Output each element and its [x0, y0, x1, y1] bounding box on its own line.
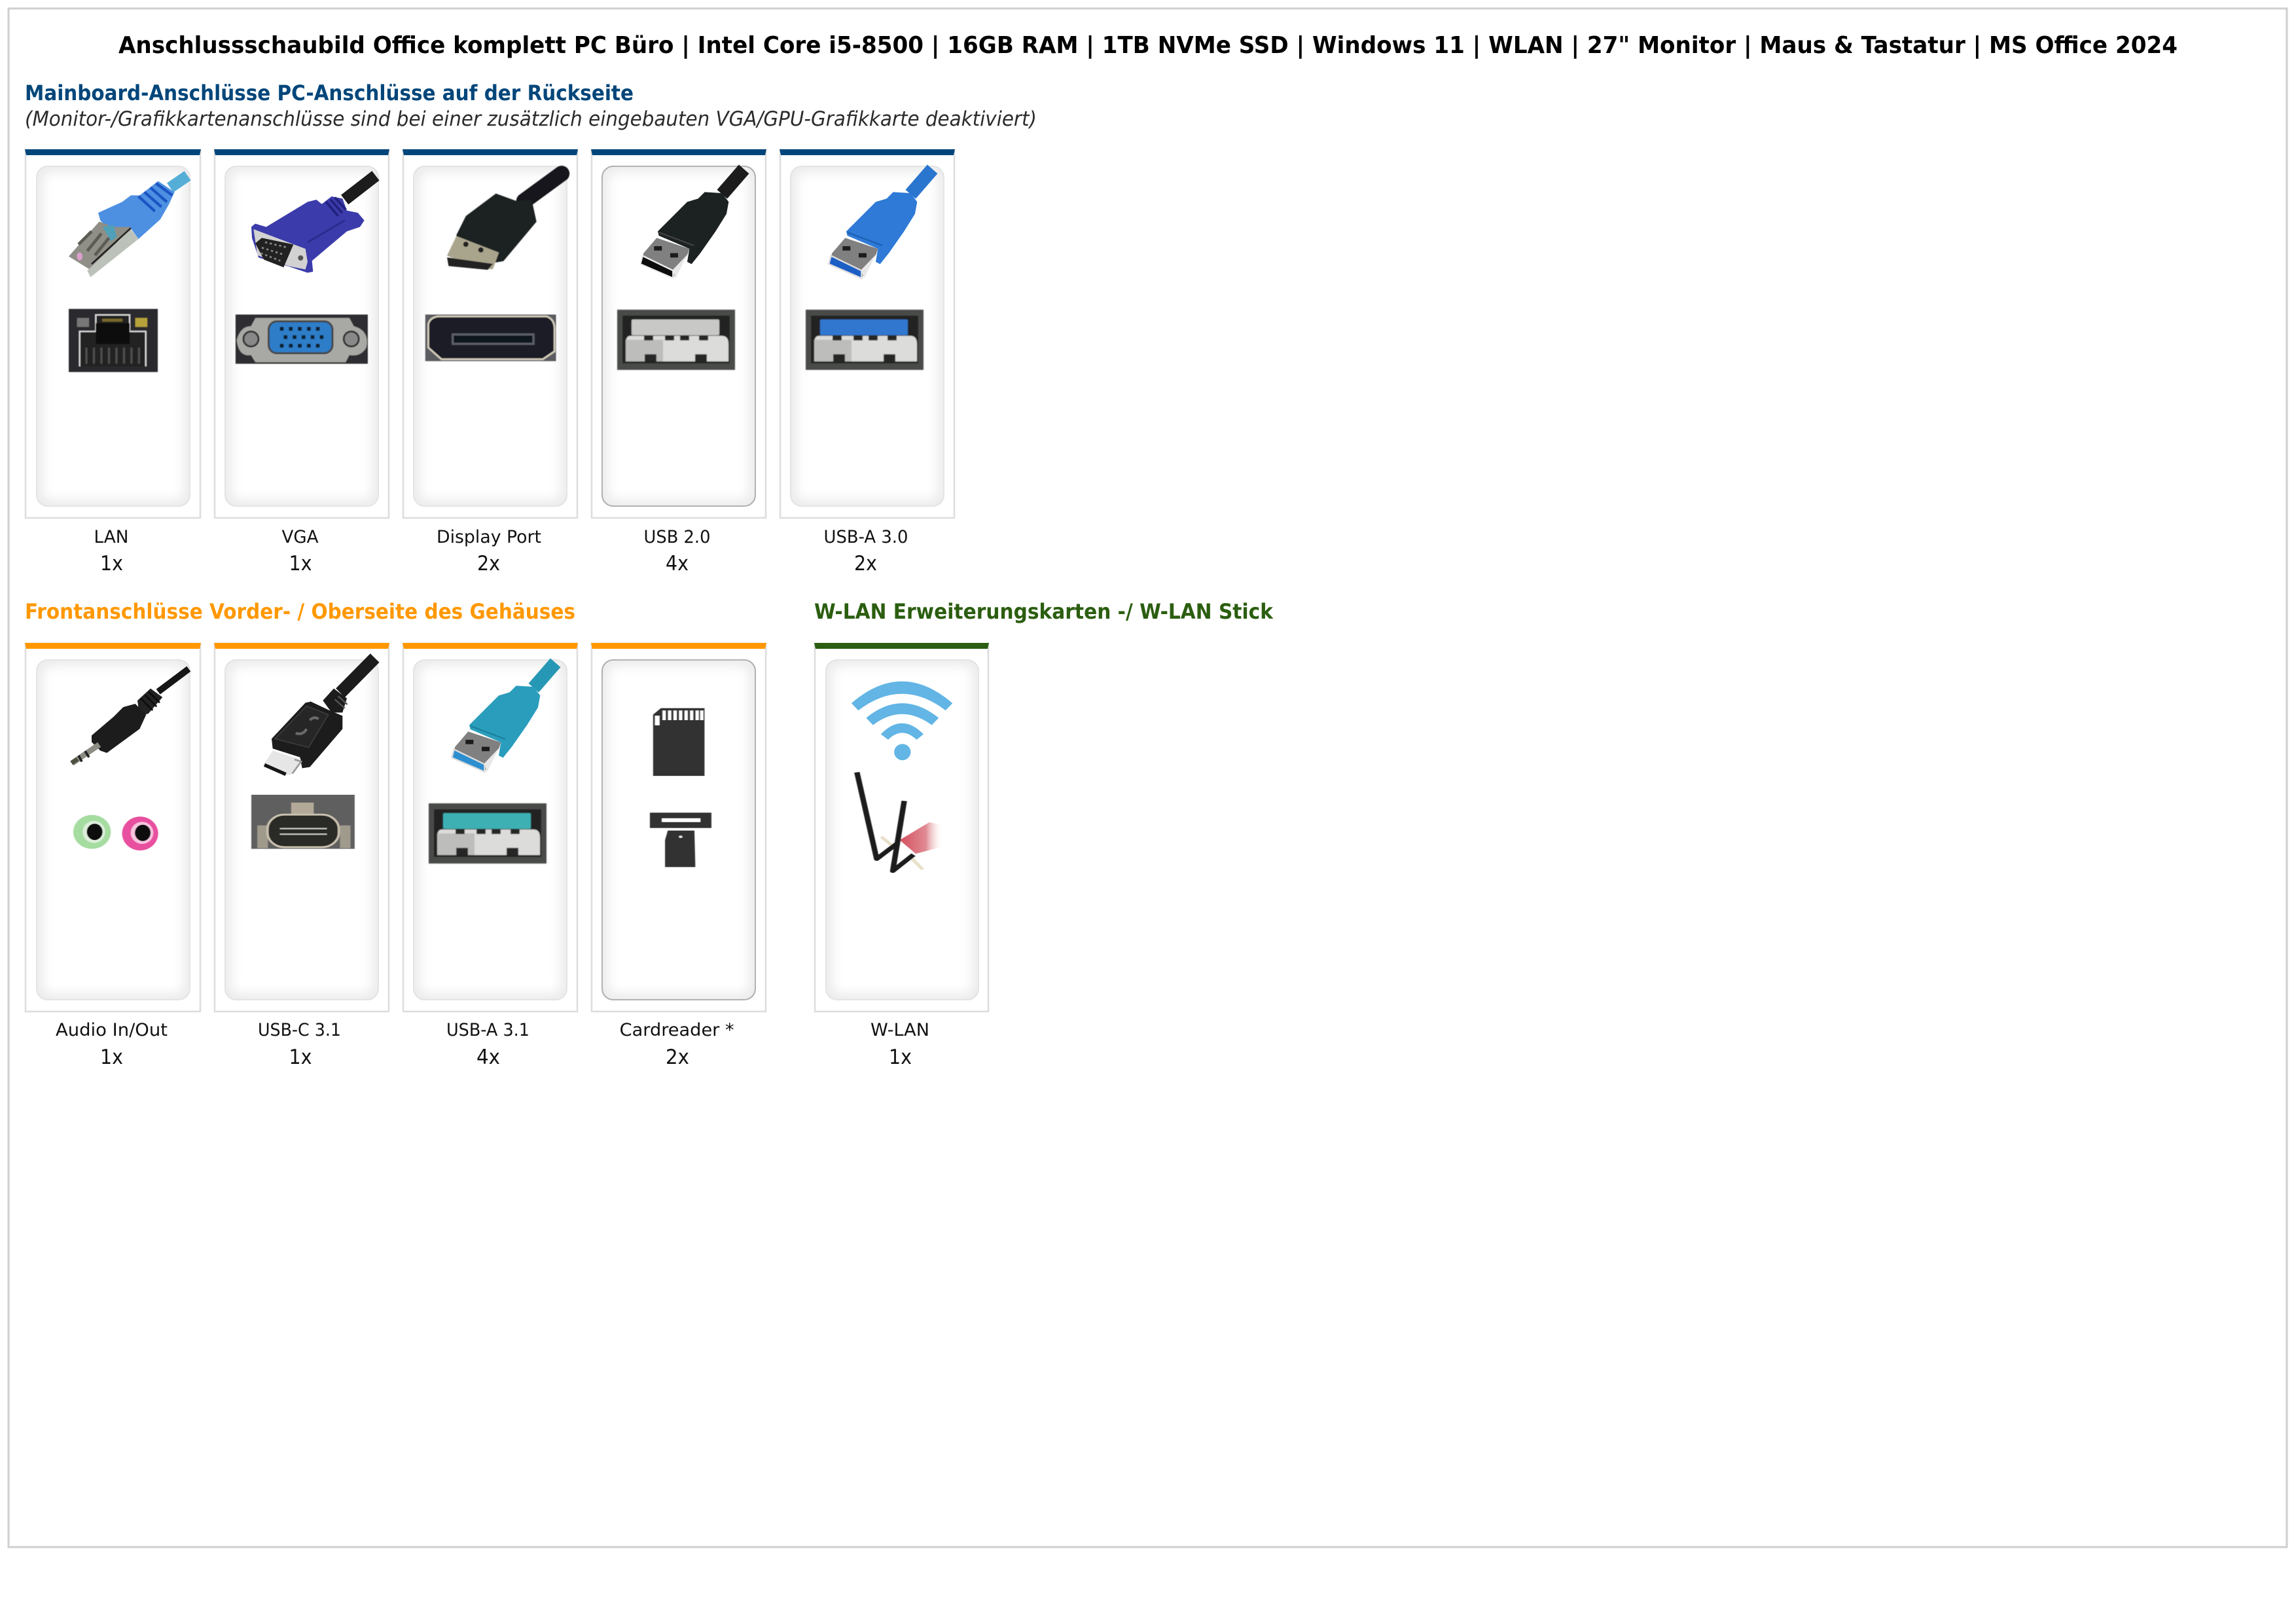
inner panel	[225, 166, 378, 506]
label: USB 2.0: USB 2.0	[644, 527, 711, 547]
icon: WLAN card with antennas	[857, 773, 943, 871]
quantity: W-LAN: 1x	[889, 1046, 912, 1069]
heading: Mainboard: Mainboard-Anschlüsse PC-Anschlüsse auf der Rückseite	[25, 81, 634, 105]
icon: Display Port socket	[425, 314, 556, 361]
top bar	[25, 149, 201, 155]
label: USB-A 3.1: USB-A 3.1	[446, 1020, 529, 1040]
card frame	[403, 150, 577, 518]
top bar	[403, 149, 578, 155]
icon: USB 2.0 plug	[640, 169, 744, 279]
card: USB-A 3.0	[780, 149, 955, 575]
inner panel	[602, 166, 755, 506]
quantity: Display Port: 2x	[477, 552, 500, 575]
note: Grafikkarte: (Monitor-/Grafikkartenanschlüsse sind bei einer zusätzlich eingebauten VGA/GPU-Grafikkarte deaktiviert)	[25, 107, 1037, 131]
icon: USB-C plug	[264, 658, 375, 775]
inner panel	[826, 660, 978, 1000]
card frame	[780, 150, 954, 518]
quantity: USB 2.0: 4x	[666, 552, 689, 575]
card: LAN	[25, 149, 201, 575]
heading: Frontanschlüsse: Frontanschlüsse Vorder- / Oberseite des Gehäuses	[25, 599, 575, 624]
label: LAN: LAN	[94, 527, 128, 547]
top bar	[214, 643, 389, 649]
icon: LAN plug	[69, 175, 188, 277]
top bar	[780, 149, 955, 155]
card frame	[592, 150, 766, 518]
label: Display Port: Display Port	[437, 527, 541, 547]
top bar	[403, 643, 578, 649]
inner panel	[37, 166, 190, 506]
icon: card slot and microSD	[650, 812, 711, 867]
card: USB-A 3.1	[403, 643, 578, 1069]
card: Cardreader	[591, 643, 766, 1069]
card: USB-C 3.1	[214, 643, 389, 1069]
label: USB-C 3.1: USB-C 3.1	[258, 1020, 341, 1040]
top bar	[814, 643, 989, 649]
icon: wifi symbol	[852, 682, 952, 760]
label: Audio In/Out: Audio In/Out	[56, 1020, 168, 1040]
card frame	[403, 644, 577, 1012]
card frame	[592, 644, 766, 1012]
label: Cardreader: Cardreader *	[620, 1020, 734, 1040]
icon: USB-C port	[251, 795, 355, 849]
card frame	[215, 150, 389, 518]
inner panel	[602, 660, 755, 1000]
top bar	[591, 643, 766, 649]
icon: audio jack	[71, 669, 188, 763]
card frame	[815, 644, 988, 1012]
icon: Display Port plug	[447, 173, 562, 270]
inner panel	[414, 660, 567, 1000]
label: VGA: VGA	[281, 527, 319, 547]
quantity: USB-C: 1x	[289, 1046, 312, 1069]
icon: VGA plug	[251, 175, 376, 273]
card: W-LAN	[814, 643, 989, 1069]
icon: USB 2.0 port	[617, 310, 735, 370]
quantity: USB-A 3.0: 2x	[854, 552, 877, 575]
top bar	[25, 643, 201, 649]
card: VGA	[214, 149, 389, 575]
label: W-LAN: W-LAN	[870, 1020, 929, 1040]
inner panel	[414, 166, 567, 506]
card frame	[26, 644, 200, 1012]
label: USB-A 3.0: USB-A 3.0	[823, 527, 908, 547]
icon: VGA port	[236, 314, 368, 364]
heading: W-LAN: W-LAN Erweiterungskarten -/ W-LAN Stick	[814, 599, 1274, 624]
quantity: VGA: 1x	[289, 552, 312, 575]
icon: USB-A 3.1 plug	[452, 663, 556, 773]
card frame	[26, 150, 200, 518]
quantity: LAN: 1x	[100, 552, 123, 575]
inner panel	[791, 166, 944, 506]
icon: USB-A 3.0 port	[806, 310, 924, 370]
inner panel	[37, 660, 190, 1000]
inner panel	[225, 660, 378, 1000]
top bar	[591, 149, 766, 155]
quantity: Audio: 1x	[100, 1046, 123, 1069]
card: Audio	[25, 643, 201, 1069]
top bar	[214, 149, 389, 155]
icon: audio ports	[73, 815, 158, 850]
icon: USB-A 3.0 plug	[829, 169, 933, 279]
icon: USB-A 3.1 port	[429, 803, 547, 864]
quantity: USB-A 3.1: 4x	[476, 1046, 500, 1069]
title: Anschlussschaubild Office komplett PC Büro | Intel Core i5-8500 | 16GB RAM | 1TB NVMe SSD | Windows 11 | WLAN | 27" Monitor | Maus & Tastatur | MS Office 2024	[118, 32, 2178, 59]
card: Display Port	[403, 149, 578, 575]
quantity: Cardreader: 2x	[666, 1046, 689, 1069]
card frame	[215, 644, 389, 1012]
icon: LAN port	[69, 309, 158, 372]
card: USB 2.0	[591, 149, 766, 575]
icon: SD card	[653, 708, 704, 776]
